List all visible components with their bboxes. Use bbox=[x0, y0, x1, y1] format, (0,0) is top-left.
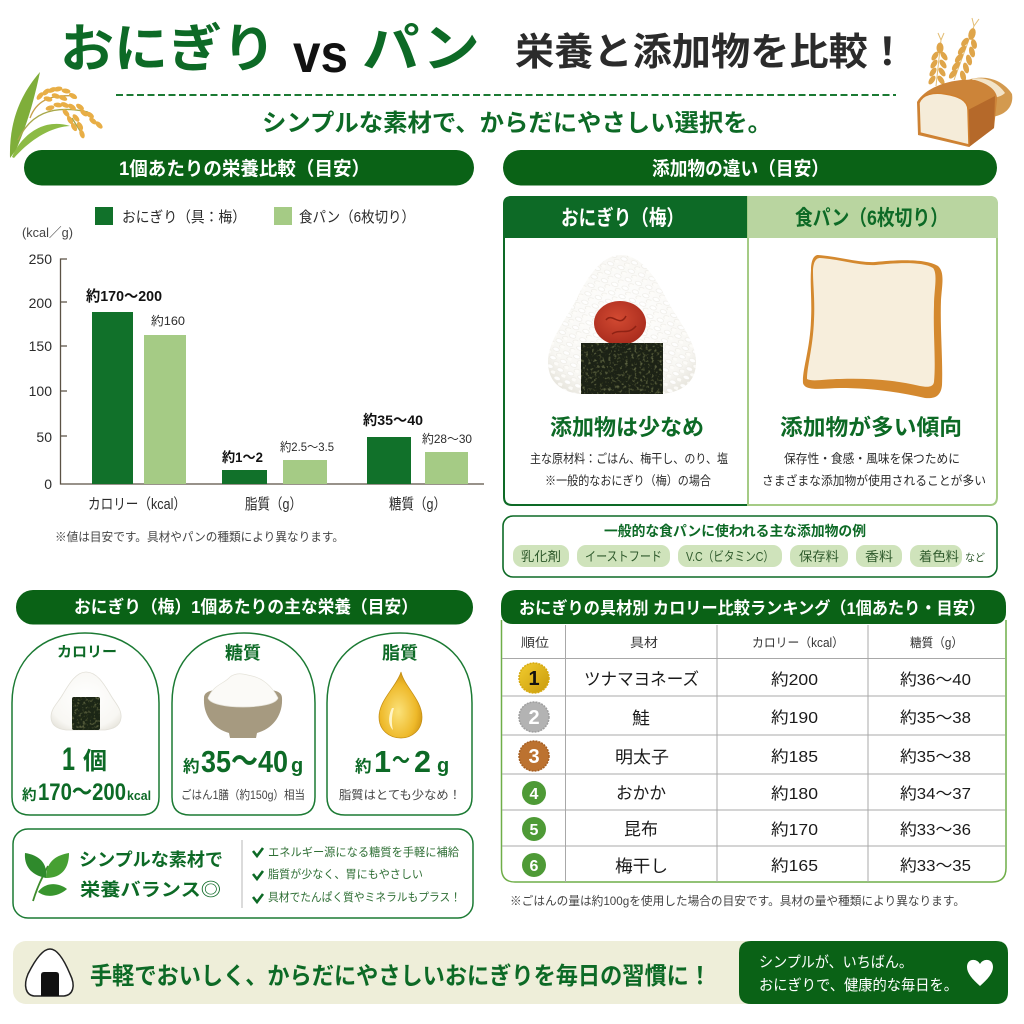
check list: エネルギー源になる糖質を手軽に補給 bbox=[268, 845, 459, 859]
check list bbox=[253, 845, 461, 904]
table: filling calorie ranking bbox=[501, 590, 1006, 882]
panel: bread additives bbox=[748, 196, 998, 505]
footer callout bbox=[739, 941, 1008, 1004]
bars: carbohydrate: 糖質（g） bbox=[389, 495, 446, 513]
legend: 食パン（6枚切り） bbox=[299, 209, 415, 226]
bars: calories: カロリー（kcal） bbox=[88, 496, 186, 513]
additive chips: イーストフード bbox=[585, 549, 662, 564]
subtitle: シンプルな素材で、からだにやさしい選択を。 bbox=[262, 110, 772, 137]
value: fat grams: 1 bbox=[374, 744, 391, 779]
row 5: 昆布 bbox=[624, 820, 658, 839]
icon: onigiri bbox=[51, 672, 121, 730]
value: fat grams: g bbox=[437, 755, 449, 777]
row 5 bbox=[522, 817, 971, 841]
row 5: 約170 bbox=[771, 821, 818, 839]
footer callout: シンプルが、いちばん。 bbox=[759, 954, 913, 971]
fat note: 脂質はとても少なめ！ bbox=[339, 787, 461, 802]
row 3: 明太子 bbox=[615, 748, 669, 767]
heading: nutrition comparison bbox=[24, 150, 474, 186]
row 2: 鮭 bbox=[632, 709, 650, 728]
onigiri ingredient text bbox=[530, 451, 728, 488]
value: fat grams: ～ bbox=[392, 748, 410, 773]
additive examples heading: 一般的な食パンに使われる主な添加物の例 bbox=[604, 523, 866, 539]
icon: rice bowl bbox=[204, 674, 282, 738]
row 2: 2 bbox=[528, 707, 540, 729]
panel: onigiri additives bbox=[504, 196, 748, 505]
panel: simple ingredients bbox=[13, 829, 473, 918]
bread additive text: さまざまな添加物が使用されることが多い bbox=[762, 473, 986, 488]
title: vs bbox=[293, 24, 348, 84]
row 5: 約33～36 bbox=[900, 821, 971, 839]
row 2: 約190 bbox=[771, 709, 818, 727]
check list: 具材でたんぱく質やミネラルもプラス！ bbox=[268, 890, 461, 904]
y axis: 50 bbox=[36, 429, 52, 445]
additive chips: 乳化剤 bbox=[521, 549, 561, 564]
table header row: 糖質（g） bbox=[910, 635, 963, 650]
value: fat grams: 約 bbox=[355, 757, 372, 776]
photo: umeboshi onigiri bbox=[548, 255, 696, 394]
row 4: 約180 bbox=[771, 785, 818, 803]
additive chips: 保存料 bbox=[799, 549, 839, 564]
row 6: 約165 bbox=[771, 857, 818, 875]
row 1: ツナマヨネーズ bbox=[584, 670, 699, 689]
message bbox=[79, 850, 223, 900]
bars: calories bbox=[86, 288, 186, 513]
y axis: (kcal／g) bbox=[22, 225, 73, 240]
title: パン bbox=[362, 21, 480, 79]
row 1 bbox=[519, 663, 971, 693]
bread additive text bbox=[762, 451, 986, 488]
y axis: 0 bbox=[44, 476, 52, 492]
value: one piece bbox=[62, 741, 107, 777]
value: calories: 約 bbox=[22, 787, 36, 804]
additive chips: など bbox=[965, 552, 985, 564]
footer callout: おにぎりで、健康的な毎日を。 bbox=[759, 977, 958, 994]
table header row bbox=[521, 635, 963, 650]
table header row: カロリー（kcal） bbox=[752, 636, 844, 650]
bars: fat: 約1～2 bbox=[222, 449, 263, 465]
y axis: 100 bbox=[29, 383, 52, 399]
card: fat bbox=[327, 633, 472, 815]
y axis: 200 bbox=[29, 295, 52, 311]
card heading: 糖質 bbox=[225, 643, 261, 663]
row 4: 約34～37 bbox=[900, 785, 971, 803]
icon: onigiri outline bbox=[26, 949, 73, 996]
legend: おにぎり（具：梅） bbox=[122, 209, 246, 226]
verdict: more additives: 添加物が多い傾向 bbox=[780, 415, 962, 440]
message: 栄養バランス◎ bbox=[80, 879, 221, 900]
footer banner bbox=[13, 941, 1008, 1004]
table header row: 具材 bbox=[630, 636, 658, 650]
heading: onigiri nutrition: おにぎり（梅）1個あたりの主な栄養（目安） bbox=[74, 597, 418, 617]
chart note: ※値は目安です。具材やパンの種類により異なります。 bbox=[55, 529, 344, 544]
wheat ears bbox=[927, 18, 979, 86]
row 1: 約200 bbox=[771, 671, 818, 689]
row 3 bbox=[519, 741, 971, 771]
row 5: 5 bbox=[530, 822, 539, 839]
onigiri ingredient text: 主な原材料：ごはん、梅干し、のり、塩 bbox=[530, 451, 728, 466]
heading: nutrition comparison: 1個あたりの栄養比較（目安） bbox=[119, 158, 370, 180]
onigiri ingredient text: ※一般的なおにぎり（梅）の場合 bbox=[545, 473, 711, 488]
additive chips bbox=[513, 545, 985, 567]
table title bar bbox=[501, 590, 1006, 624]
heading: additive difference bbox=[503, 150, 997, 186]
row 3: 約185 bbox=[771, 748, 818, 766]
panel heading: 食パン（6枚切り） bbox=[795, 207, 948, 230]
row 6 bbox=[522, 853, 971, 877]
card heading: カロリー bbox=[57, 644, 117, 661]
row 1: 約36～40 bbox=[900, 671, 971, 689]
row 4 bbox=[522, 781, 971, 805]
table footnote: ※ごはんの量は約100gを使用した場合の目安です。具材の量や種類により異なります。 bbox=[510, 893, 965, 908]
value: fat grams bbox=[355, 744, 449, 779]
bars: fat: 脂質（g） bbox=[245, 495, 302, 513]
icon: rice plant bbox=[10, 72, 104, 158]
heading: additive difference: 添加物の違い（目安） bbox=[652, 157, 829, 180]
value: one piece: 1 bbox=[62, 741, 75, 777]
icon: heart bbox=[967, 960, 993, 986]
row 2 bbox=[519, 702, 971, 732]
heading: onigiri nutrition bbox=[16, 590, 473, 624]
check list: 脂質が少なく、胃にもやさしい bbox=[268, 867, 423, 881]
bars: carbohydrate: 約35～40 bbox=[363, 412, 423, 428]
y axis: 250 bbox=[29, 251, 52, 267]
icon: oil drop bbox=[379, 672, 422, 738]
footer message: 手軽でおいしく、からだにやさしいおにぎりを毎日の習慣に！ bbox=[90, 962, 711, 990]
row 1: 1 bbox=[528, 668, 540, 690]
row 4: 4 bbox=[530, 786, 539, 803]
value: fat grams: 2 bbox=[414, 744, 431, 779]
value: calories: 170～200 bbox=[38, 779, 126, 806]
photo: bread slice bbox=[803, 255, 942, 398]
bars: carbohydrate bbox=[363, 412, 472, 513]
message: シンプルな素材で bbox=[79, 850, 223, 870]
bars: calories: 約170～200 bbox=[86, 288, 162, 305]
panel: additive examples bbox=[503, 516, 997, 577]
title bbox=[60, 21, 907, 84]
icon: bread loaf and wheat bbox=[917, 18, 1012, 147]
table header row: 順位 bbox=[521, 636, 550, 650]
value: carbohydrate grams: 35～40 bbox=[201, 744, 288, 779]
icon: leaves bbox=[25, 853, 69, 901]
bars: fat: 約2.5～3.5 bbox=[280, 439, 334, 454]
bars: fat bbox=[222, 439, 334, 513]
bread additive text: 保存性・食感・風味を保つために bbox=[784, 451, 960, 466]
row 4: おかか bbox=[616, 784, 666, 803]
additive chips: 着色料 bbox=[919, 549, 959, 564]
additive chips: 香料 bbox=[865, 549, 893, 564]
value: one piece: 個 bbox=[83, 748, 107, 775]
legend bbox=[95, 207, 415, 226]
bars: carbohydrate: 約28～30 bbox=[422, 431, 472, 446]
title: おにぎり bbox=[60, 21, 276, 79]
y axis bbox=[22, 225, 484, 492]
front loaf bbox=[917, 80, 997, 147]
row 6: 梅干し bbox=[615, 857, 668, 876]
row 3: 約35～38 bbox=[900, 748, 971, 766]
card: carbohydrate bbox=[172, 633, 315, 815]
back loaf bbox=[968, 78, 1012, 117]
y axis: 150 bbox=[29, 338, 52, 354]
value: calories: kcal bbox=[127, 788, 151, 803]
card: calories bbox=[12, 633, 159, 815]
value: carbohydrate grams: 約 bbox=[183, 757, 200, 776]
carbohydrate note: ごはん1膳（約150g）相当 bbox=[181, 787, 305, 802]
panel heading: おにぎり（梅） bbox=[561, 206, 684, 230]
value: carbohydrate grams: g bbox=[291, 755, 303, 777]
card heading: 脂質 bbox=[382, 643, 418, 663]
row 2: 約35～38 bbox=[900, 709, 971, 727]
table title bar: おにぎりの具材別 カロリー比較ランキング（1個あたり・目安） bbox=[519, 598, 985, 618]
row 6: 約33～35 bbox=[900, 857, 971, 875]
bars: calories: 約160 bbox=[151, 313, 185, 328]
bar chart: nutrition bbox=[22, 207, 484, 544]
row 6: 6 bbox=[530, 858, 539, 875]
verdict: fewer additives: 添加物は少なめ bbox=[550, 415, 704, 440]
row 3: 3 bbox=[528, 746, 540, 768]
additive chips: V.C（ビタミンC） bbox=[686, 549, 774, 564]
title: 栄養と添加物を比較！ bbox=[515, 32, 907, 74]
